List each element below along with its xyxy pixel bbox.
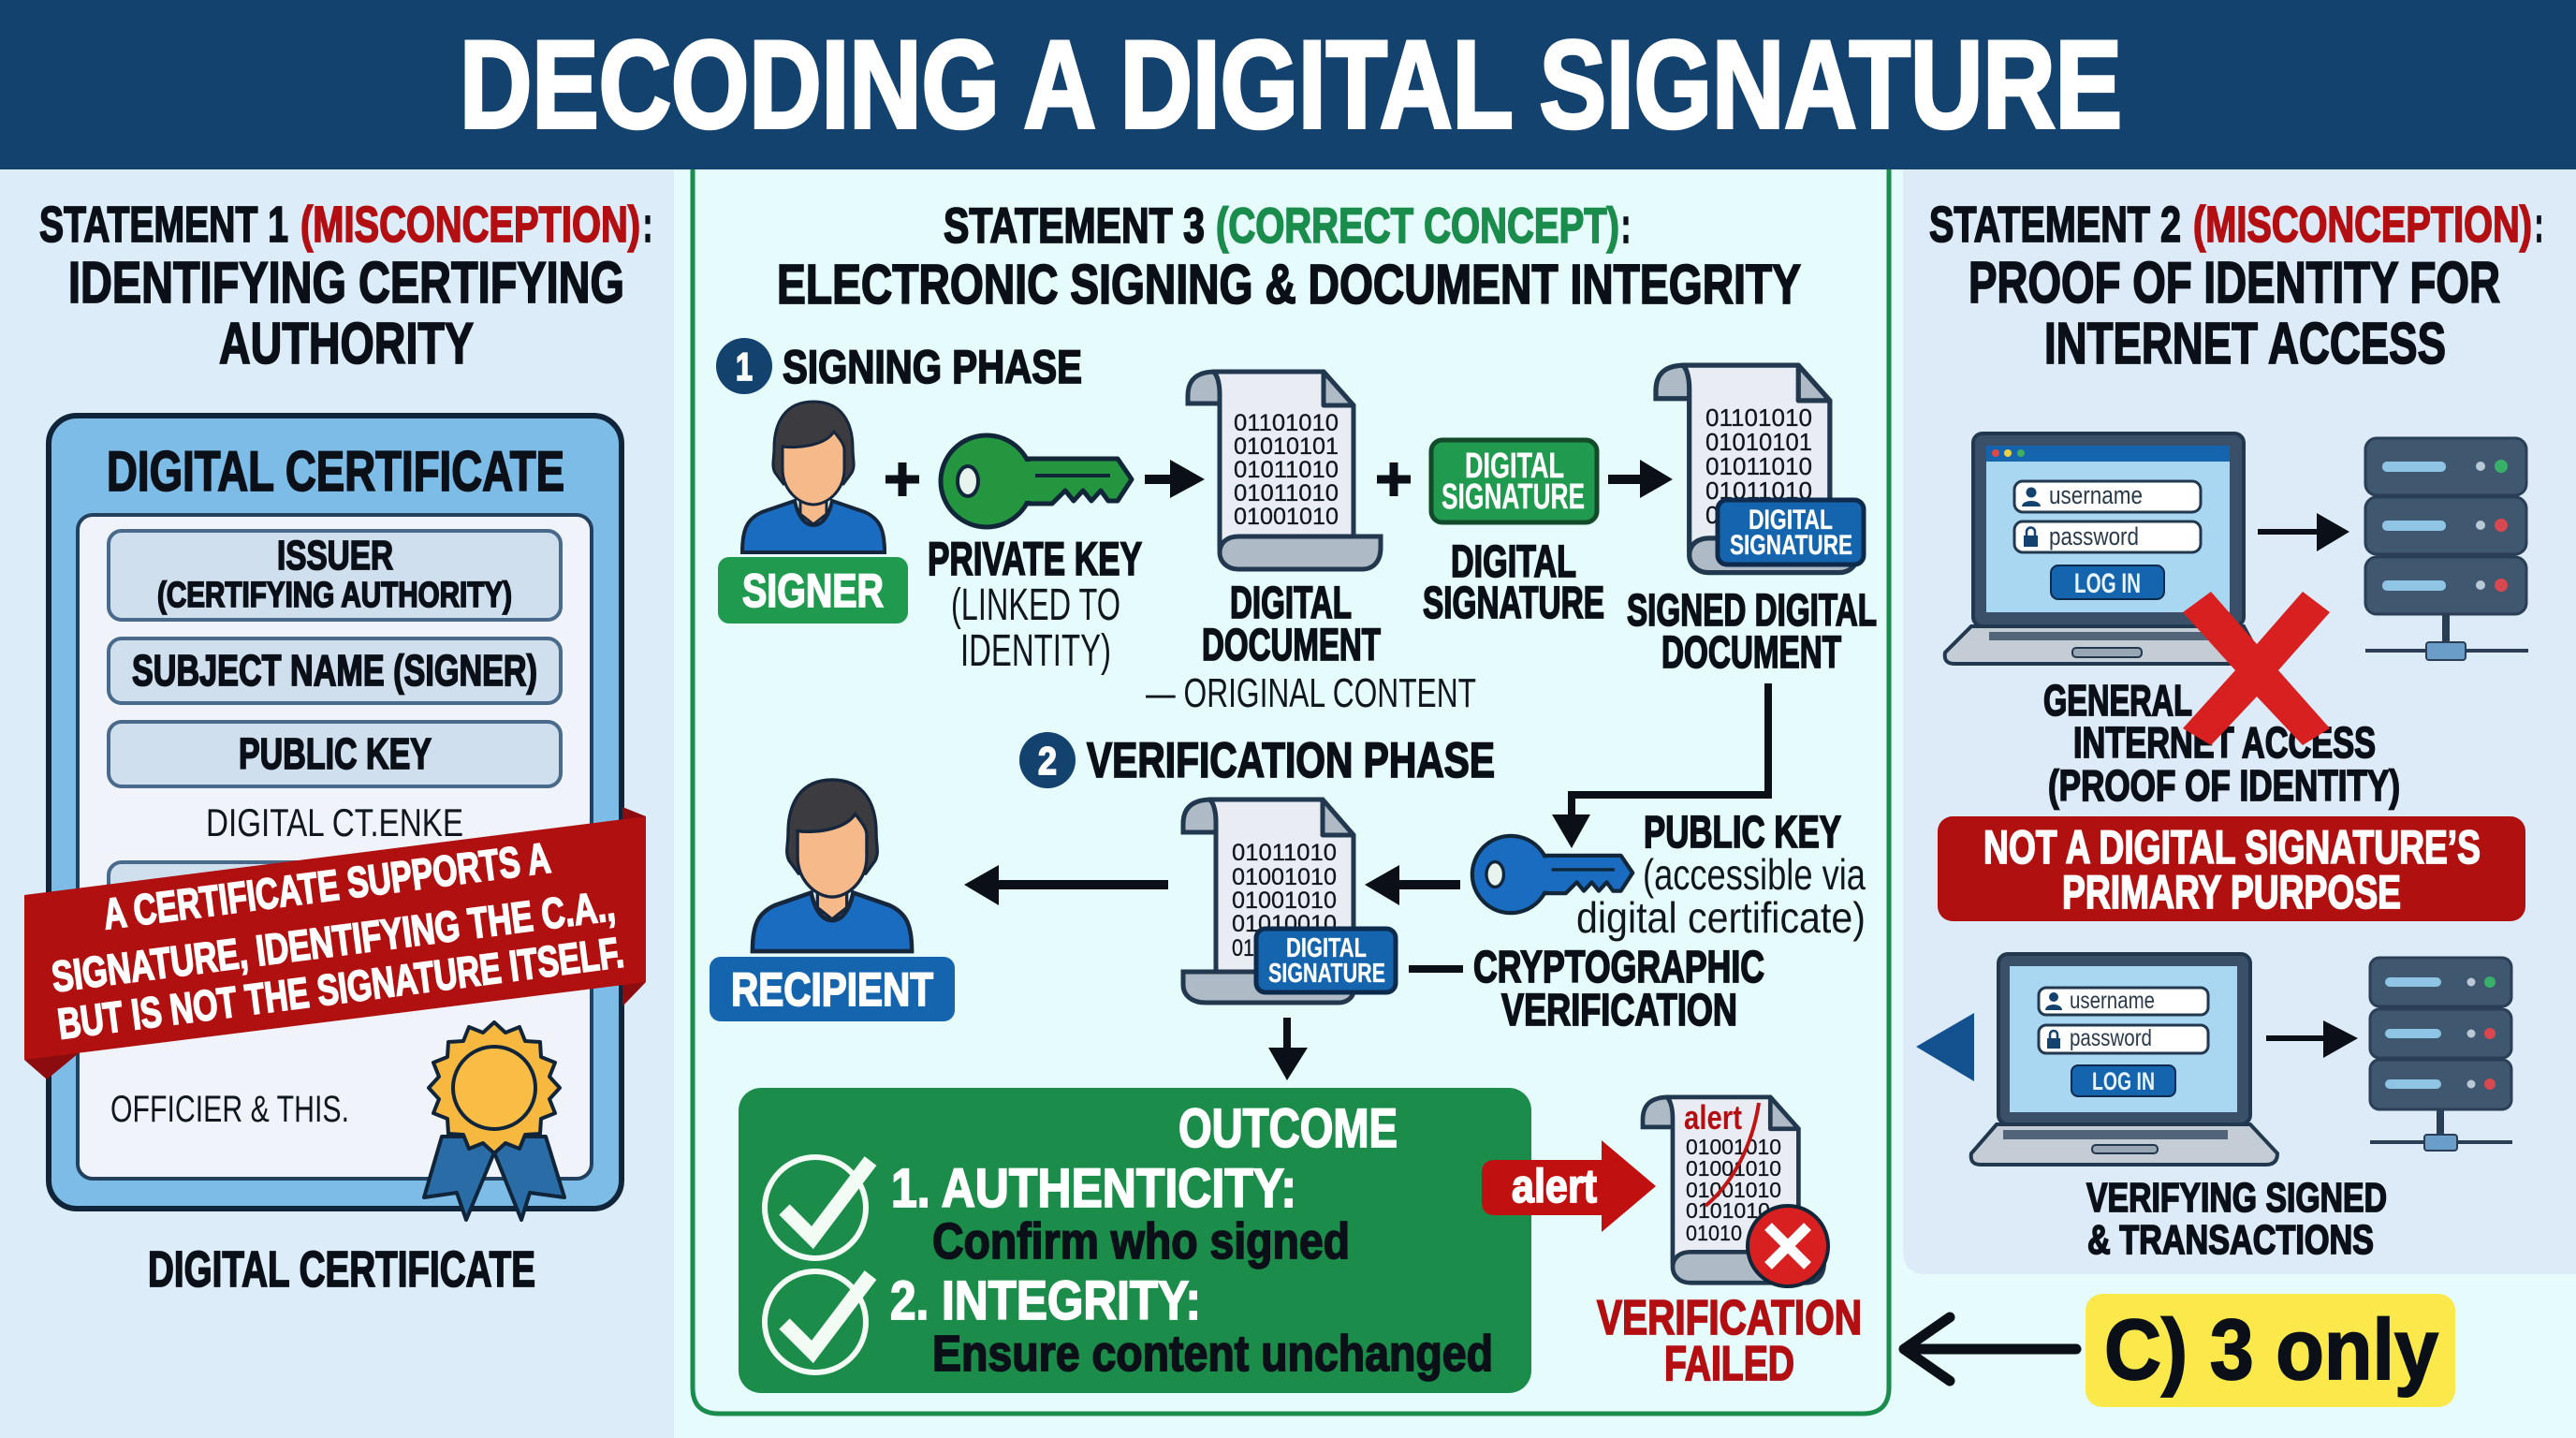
icon: server [2370, 958, 2512, 1151]
failed document: 01001010 [1686, 1135, 1781, 1159]
recipient [710, 780, 955, 1021]
public key label [1576, 808, 1866, 942]
digital document label: — ORIGINAL CONTENT [1146, 670, 1476, 716]
username field: username [2049, 481, 2143, 509]
document under verification: 01011010 [1232, 840, 1337, 866]
login button: LOG IN [2074, 568, 2141, 599]
signed digital document: 01011010 [1705, 452, 1812, 480]
header banner [0, 0, 2576, 169]
icon: server [2365, 438, 2528, 660]
outcome box: Ensure content unchanged [932, 1326, 1493, 1382]
certificate small text: DIGITAL CT.ENKE [206, 800, 463, 844]
icon: recipient person [753, 780, 912, 951]
signed digital document: 01011010 [1705, 477, 1812, 505]
private key label [928, 533, 1142, 676]
general internet access label: GENERAL [2043, 676, 2192, 725]
signature stamp: DIGITAL [1749, 505, 1833, 536]
signer badge: SIGNER [742, 565, 884, 617]
verification failed label [1597, 1291, 1862, 1391]
signature stamp [1256, 929, 1396, 992]
failed document: 01001010 [1686, 1178, 1781, 1202]
verification failed label: VERIFICATION [1597, 1291, 1862, 1345]
icon: red cross [2183, 592, 2330, 745]
icon: rosette seal [424, 1022, 564, 1220]
public key label: PUBLIC KEY [1644, 808, 1841, 858]
signed digital document: 01010101 [1705, 428, 1812, 456]
icon: error badge [1748, 1206, 1828, 1286]
icon: green private key [941, 435, 1132, 527]
signing phase heading: SIGNING PHASE [783, 341, 1082, 393]
outcome box: OUTCOME [1178, 1098, 1398, 1159]
verifying label: VERIFYING SIGNED [2086, 1175, 2387, 1221]
callout: not primary purpose [1938, 816, 2525, 921]
panel: statement 2 heading [1929, 197, 2543, 376]
alert arrow: alert [1512, 1160, 1597, 1212]
icon: laptop login [1945, 433, 2258, 664]
arrow [1145, 460, 1205, 498]
arrow to recipient [964, 865, 1168, 905]
digital signature label [1423, 537, 1604, 628]
icon: blue public key [1472, 836, 1632, 913]
callout: red banner [24, 807, 646, 1079]
certificate title: DIGITAL CERTIFICATE [107, 440, 564, 503]
failed document: 01010 [1686, 1221, 1742, 1245]
password field: password [2049, 522, 2139, 550]
verification phase heading [1019, 732, 1495, 788]
callout: not primary purpose: PRIMARY PURPOSE [2062, 866, 2401, 918]
verification phase heading: 2 [1038, 739, 1057, 783]
failed document: 01001010 [1686, 1156, 1781, 1181]
signature stamp [1718, 500, 1864, 565]
digital signature badge [1431, 440, 1597, 522]
digital certificate card [49, 416, 622, 1220]
icon: plus [886, 462, 919, 496]
panel: statement 1 heading: AUTHORITY [219, 312, 474, 376]
arrow [1608, 460, 1673, 498]
answer box: C) 3 only [2104, 1302, 2438, 1398]
signing phase heading: 1 [736, 345, 753, 389]
signed digital document: 0 [1705, 501, 1719, 529]
digital document label: DOCUMENT [1202, 621, 1381, 670]
password field [2039, 1025, 2208, 1053]
general internet access label [2043, 676, 2400, 810]
digital document label: DIGITAL [1230, 579, 1352, 628]
arrow from public key [1365, 865, 1460, 905]
panel: statement 3 heading: : [1621, 198, 1631, 254]
verification failed label: FAILED [1664, 1337, 1794, 1391]
outcome box: 2. INTEGRITY: [890, 1270, 1201, 1331]
verification phase heading: VERIFICATION PHASE [1087, 733, 1495, 788]
certificate caption: DIGITAL CERTIFICATE [148, 1241, 535, 1298]
recipient badge: RECIPIENT [731, 963, 933, 1016]
subject name field: SUBJECT NAME (SIGNER) [132, 646, 537, 695]
digital document: 01011010 [1234, 457, 1339, 483]
panel: statement 1 heading: IDENTIFYING CERTIFYING [68, 251, 624, 315]
signer [718, 402, 908, 624]
icon: blue triangle [1916, 1013, 1974, 1081]
signed digital document: 01101010 [1705, 404, 1812, 432]
digital document: 01001010 [1234, 504, 1339, 530]
digital document: 01011010 [1234, 480, 1339, 506]
digital document label [1146, 579, 1476, 716]
digital signature badge: SIGNATURE [1442, 477, 1585, 517]
issuer field: ISSUER [277, 533, 393, 579]
verifying label [2086, 1175, 2387, 1263]
signed document label: SIGNED DIGITAL [1627, 586, 1877, 636]
icon: plus [1377, 462, 1411, 496]
digital signature label: SIGNATURE [1423, 579, 1604, 628]
callout: red banner: A CERTIFICATE SUPPORTS A [100, 833, 553, 938]
public key field [109, 722, 561, 786]
public key label: (accessible via [1643, 850, 1866, 899]
login button [2051, 565, 2164, 599]
officer text: OFFICIER & THIS. [110, 1089, 349, 1130]
cryptographic verification label: VERIFICATION [1501, 986, 1737, 1035]
document under verification [1183, 800, 1396, 1003]
arrow to server [2266, 1020, 2358, 1058]
panel: statement 2 heading: STATEMENT 2 [1929, 197, 2181, 253]
panel: statement 3 heading: STATEMENT 3 [944, 198, 1205, 254]
outcome box: 1. AUTHENTICITY: [891, 1158, 1296, 1219]
outcome box: Confirm who signed [932, 1213, 1350, 1269]
callout: red banner: BUT IS NOT THE SIGNATURE ITSELF. [55, 928, 626, 1049]
icon: check 1 [765, 1157, 871, 1258]
outcome box [739, 1088, 1531, 1393]
icon: signer person [742, 402, 885, 552]
panel: statement 1 heading: : [643, 197, 652, 253]
icon: laptop login [1971, 954, 2277, 1165]
connector dash [1409, 965, 1463, 973]
password field: password [2070, 1025, 2152, 1051]
alert arrow [1482, 1140, 1656, 1232]
panel: statement 3 frame [693, 169, 1889, 1414]
private key label: PRIVATE KEY [928, 533, 1142, 585]
document under verification: 01 [1232, 935, 1254, 961]
signed digital document [1656, 365, 1864, 573]
panel: statement 1 heading: STATEMENT 1 [39, 197, 288, 253]
username field [2014, 481, 2201, 512]
public key field: PUBLIC KEY [239, 729, 432, 778]
signed document label: DOCUMENT [1661, 628, 1841, 678]
public key label: digital certificate) [1576, 893, 1866, 942]
document under verification: 01010010 [1232, 911, 1337, 937]
document under verification: 01001010 [1232, 864, 1337, 890]
signing phase heading [716, 338, 1082, 394]
digital document [1188, 372, 1381, 569]
document under verification: 01001010 [1232, 888, 1337, 914]
digital document: 01101010 [1234, 410, 1339, 436]
panel: statement 3 heading: ELECTRONIC SIGNING & DOCUMENT INTEGRITY [777, 254, 1801, 315]
failed document: alert [1684, 1098, 1742, 1137]
signer badge [718, 557, 908, 624]
cryptographic verification label: CRYPTOGRAPHIC [1473, 943, 1764, 992]
issuer field [109, 531, 561, 620]
panel: statement 2 background [1903, 169, 2576, 1274]
arrow down [1268, 1018, 1308, 1080]
general internet access label: INTERNET ACCESS [2073, 718, 2376, 767]
title: DECODING A DIGITAL SIGNATURE [460, 16, 2122, 154]
password field [2014, 521, 2201, 552]
panel: statement 1 heading: (MISCONCEPTION) [300, 197, 640, 253]
hidden field [109, 862, 561, 937]
username field: username [2070, 988, 2155, 1014]
signed document label [1627, 586, 1877, 678]
private key label: IDENTITY) [960, 626, 1111, 676]
panel: statement 1 heading [39, 197, 652, 376]
arrow to answer [1904, 1317, 2076, 1381]
panel: statement 2 heading: : [2535, 197, 2543, 253]
panel: statement 3 heading [777, 198, 1801, 315]
callout: red banner: SIGNATURE, IDENTIFYING THE C.A., [49, 881, 618, 1001]
digital signature label: DIGITAL [1451, 537, 1576, 587]
signature stamp: SIGNATURE [1268, 959, 1385, 989]
icon: check 2 [765, 1271, 871, 1372]
arrow to server [2258, 513, 2349, 551]
digital signature badge: DIGITAL [1465, 447, 1564, 486]
failed document: 0101010 [1686, 1198, 1770, 1223]
panel: statement 1 background [0, 169, 674, 1438]
panel: statement 2 heading: INTERNET ACCESS [2044, 312, 2446, 376]
signature stamp: SIGNATURE [1730, 530, 1852, 561]
issuer field: (CERTIFYING AUTHORITY) [157, 576, 512, 615]
cryptographic verification label [1473, 943, 1764, 1035]
connector arrow [1552, 683, 1768, 848]
panel: statement 3 heading: (CORRECT CONCEPT) [1216, 198, 1619, 254]
recipient badge [710, 957, 955, 1021]
general internet access label: (PROOF OF IDENTITY) [2048, 761, 2400, 810]
failed document [1643, 1097, 1828, 1286]
digital document: 01010101 [1234, 433, 1339, 460]
verifying label: & TRANSACTIONS [2087, 1217, 2374, 1263]
subject name field [109, 638, 561, 703]
signature stamp: DIGITAL [1286, 933, 1367, 963]
private key label: (LINKED TO [951, 580, 1120, 630]
username field [2039, 988, 2208, 1015]
login button: LOG IN [2092, 1067, 2155, 1095]
